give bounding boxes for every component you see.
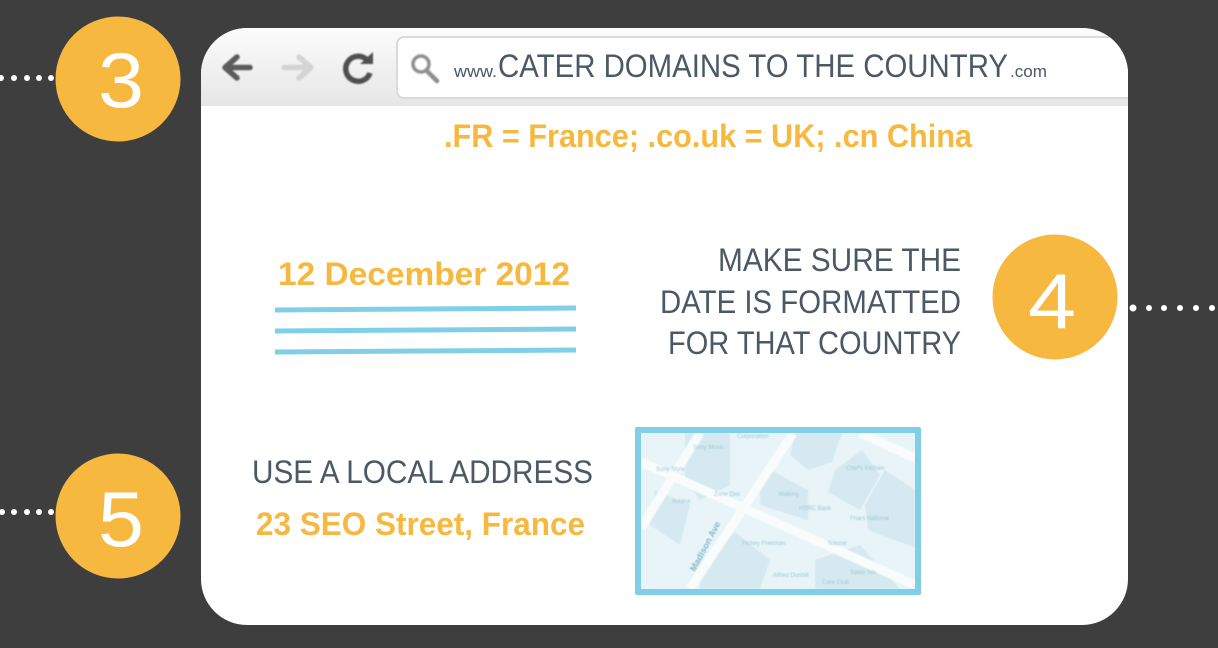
browser toolbar [201, 28, 1128, 106]
connector dots: step 4 [1130, 304, 1215, 312]
map: Zone Diet [714, 492, 740, 498]
map: Walking [778, 492, 799, 498]
date format text [662, 248, 960, 354]
panel: browser window [201, 28, 1157, 625]
map: HSBC Bank [799, 506, 832, 512]
URL text [454, 54, 1046, 78]
icon: back arrow [225, 57, 250, 78]
icon: reload [346, 52, 373, 81]
map: Sony Music [693, 445, 724, 451]
map: Chef's Kitchen [846, 466, 884, 472]
step badge 4 [992, 234, 1118, 360]
map: Core Club [822, 580, 850, 586]
URL text: .com [1010, 62, 1047, 81]
date format text: MAKE SURE THE [718, 242, 961, 278]
step badge 4: 4 [1028, 257, 1076, 345]
address bar [397, 37, 1157, 98]
map: Friars National [850, 516, 889, 522]
local address text: USE A LOCAL ADDRESS [252, 454, 593, 490]
map: Nascar [828, 541, 847, 547]
map: Hickey Freeman [742, 541, 786, 547]
icon: search magnifier [413, 56, 437, 81]
map: Sony Style [656, 467, 685, 473]
map: Alfred Dunhill [773, 573, 809, 579]
date format text: DATE IS FORMATTED [660, 284, 961, 320]
map: Asiana [672, 499, 691, 505]
step badge 3: 3 [98, 36, 144, 124]
URL text: www. [453, 62, 497, 81]
address example: 23 SEO Street, France [256, 506, 585, 542]
step badge 3 [56, 16, 180, 142]
connector dots: step 5 [0, 509, 54, 515]
date example [275, 256, 576, 352]
URL text: CATER DOMAINS TO THE COUNTRY [498, 48, 1008, 84]
map [635, 427, 921, 595]
map: Corporation [737, 434, 768, 440]
map: Madison Ave [688, 520, 723, 573]
connector dots: step 3 [0, 75, 54, 81]
step badge 5: 5 [98, 475, 144, 563]
map: Salon Ials [850, 570, 876, 576]
step badge 5 [56, 454, 180, 578]
domain examples: .FR = France; .co.uk = UK; .cn China [444, 118, 972, 154]
icon: forward arrow [284, 57, 311, 78]
date example: 12 December 2012 [278, 256, 570, 292]
date format text: FOR THAT COUNTRY [668, 325, 961, 361]
